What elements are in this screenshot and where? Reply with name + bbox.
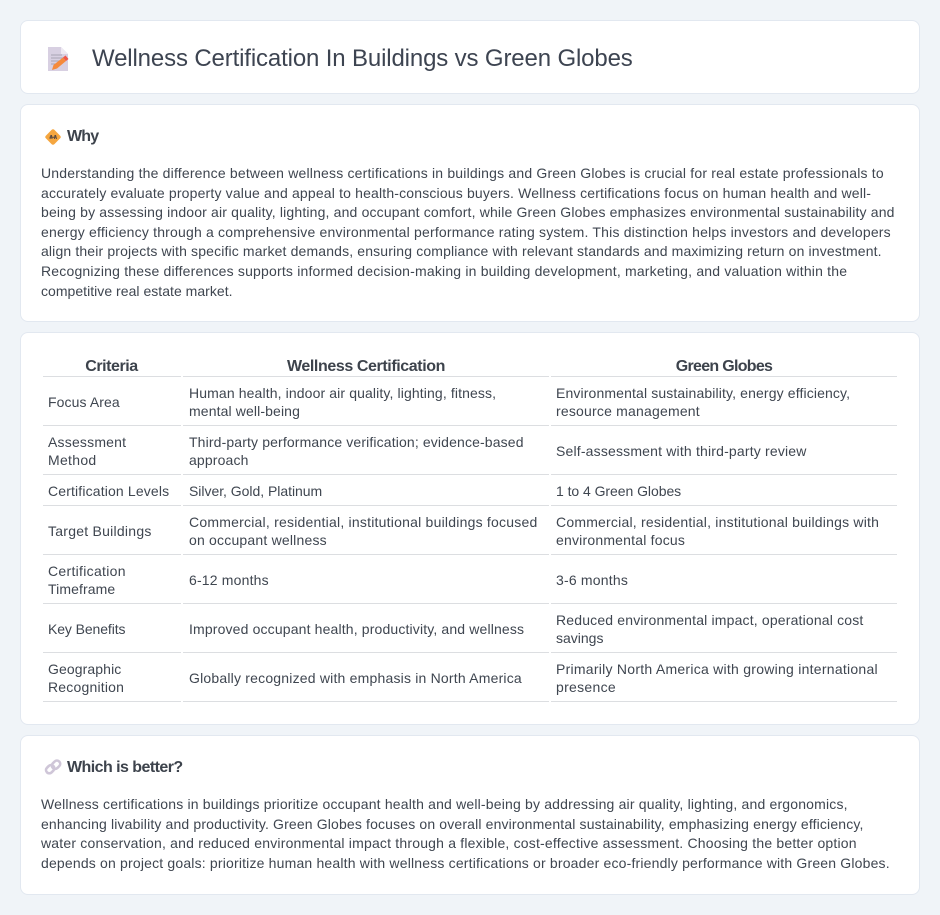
table header <box>85 358 772 375</box>
row: geographic recognition: Geographic <box>48 661 121 677</box>
row: certification timeframe: 3-6 months <box>556 572 628 588</box>
text block: why: align their projects with specific market demands, ensuring compliance with relevant standards and maximizing return on investment. <box>41 243 882 259</box>
row: assessment method: Method <box>48 452 96 468</box>
table header: Criteria <box>85 358 138 375</box>
text block: why: Recognizing these differences supports informed decision-making in building development, marketing, and valuation within the <box>41 263 847 279</box>
row: assessment method: Self-assessment with third-party review <box>556 443 807 459</box>
text block: why: being by assessing indoor air quality, lighting, and occupant comfort, while Green Globes emphasizes environmental sustainability and <box>41 204 895 220</box>
row: certification levels: 1 to 4 Green Globes <box>556 483 681 499</box>
row: certification timeframe: Timeframe <box>48 581 115 597</box>
icon: chain link <box>44 759 62 775</box>
row: target buildings: on occupant wellness <box>189 532 327 548</box>
row: focus area: Human health, indoor air quality, lighting, fitness, <box>189 385 496 401</box>
table header: Wellness Certification <box>287 358 445 375</box>
row: geographic recognition: Primarily North America with growing international <box>556 661 878 677</box>
row: assessment method: approach <box>189 452 249 468</box>
row: focus area <box>48 385 850 419</box>
row: target buildings <box>48 514 879 548</box>
panel: why <box>20 104 920 322</box>
text block: why: energy efficiency through a comprehensive environmental performance rating system. This distinction helps investors and developers <box>41 224 891 240</box>
panel: which is better <box>20 735 920 895</box>
text block: which is better <box>41 796 890 871</box>
icon: document with pencil <box>48 47 68 71</box>
row: assessment method: Assessment <box>48 434 126 450</box>
row: certification levels <box>48 483 681 499</box>
title: Wellness Certification In Buildings vs Green Globes <box>92 45 633 72</box>
row: key benefits: Reduced environmental impact, operational cost <box>556 612 863 628</box>
table rules <box>43 376 897 702</box>
text block: why <box>41 165 895 299</box>
row: certification timeframe: Certification <box>48 563 126 579</box>
heading: why: Why <box>67 128 98 145</box>
row: key benefits: Improved occupant health, productivity, and wellness <box>189 621 524 637</box>
row: certification timeframe <box>48 563 628 597</box>
row: key benefits <box>48 612 864 646</box>
row: geographic recognition: presence <box>556 679 616 695</box>
panel: title card <box>20 20 920 94</box>
table header: Green Globes <box>676 358 772 375</box>
row: geographic recognition: Recognition <box>48 679 124 695</box>
row: focus area: mental well-being <box>189 403 300 419</box>
heading: which is better: Which is better? <box>67 759 183 776</box>
text block: why: competitive real estate market. <box>41 283 233 299</box>
panel: comparison table <box>20 332 920 725</box>
row: assessment method: Third-party performance verification; evidence-based <box>189 434 524 450</box>
row: target buildings: environmental focus <box>556 532 685 548</box>
row: key benefits: savings <box>556 630 603 646</box>
row: focus area: Environmental sustainability, energy efficiency, <box>556 385 850 401</box>
row: target buildings: Commercial, residential, institutional buildings focused <box>189 514 537 530</box>
row: key benefits: Key Benefits <box>48 621 125 637</box>
text block: which is better: water conservation, and reduced environmental impact through a flexible, cost-effective assessment. Choosing the better option <box>41 835 857 851</box>
row: assessment method <box>48 434 807 468</box>
icon: diamond sign <box>45 129 61 145</box>
row: certification timeframe: 6-12 months <box>189 572 269 588</box>
row: certification levels: Certification Levels <box>48 483 169 499</box>
row: geographic recognition: Globally recognized with emphasis in North America <box>189 670 522 686</box>
text block: why: Understanding the difference between wellness certifications in buildings and Green Globes is crucial for real estate professionals to <box>41 165 884 181</box>
text block: which is better: depends on project goals: prioritize human health with wellness certifications or broader eco-friendly performance with Green Globes. <box>41 855 890 871</box>
text block: why: accurately evaluate property value and appeal to health-conscious buyers. Wellness certifications focus on human health and well- <box>41 185 871 201</box>
row: target buildings: Target Buildings <box>48 523 152 539</box>
row: target buildings: Commercial, residential, institutional buildings with <box>556 514 879 530</box>
row: focus area: Focus Area <box>48 394 120 410</box>
text block: which is better: enhancing livability and productivity. Green Globes focuses on overall environmental sustainability, emphasizing energy efficiency, <box>41 816 864 832</box>
row: focus area: resource management <box>556 403 700 419</box>
row: geographic recognition <box>48 661 878 695</box>
row: certification levels: Silver, Gold, Platinum <box>189 483 322 499</box>
text block: which is better: Wellness certifications in buildings prioritize occupant health and well-being by addressing air quality, lighting, and ergonomics, <box>41 796 848 812</box>
